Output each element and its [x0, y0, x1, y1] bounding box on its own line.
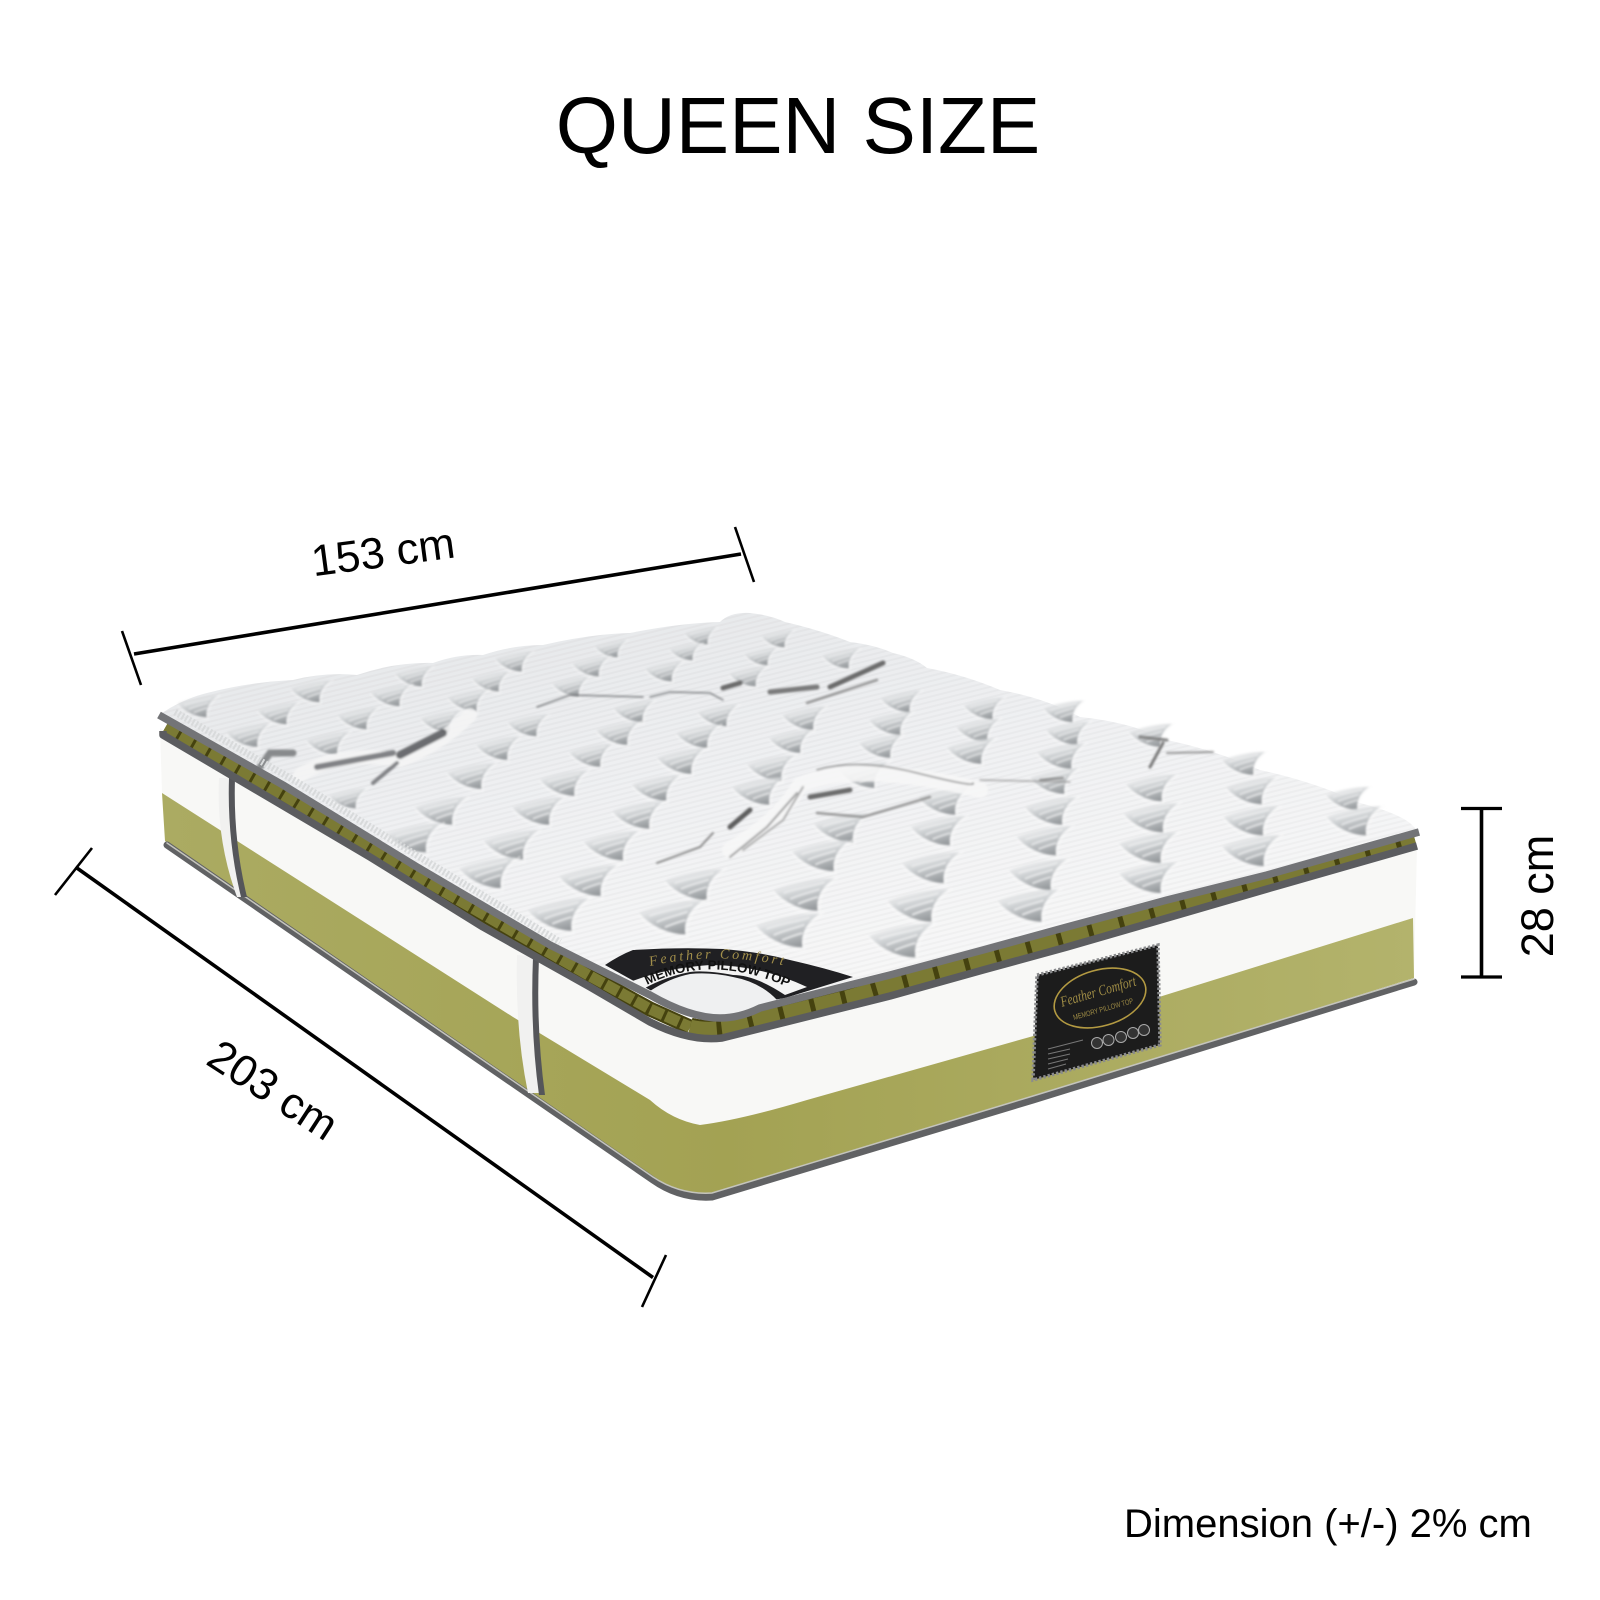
- width dimension: 153 cm: 153 cm: [308, 519, 458, 586]
- bottom piping: [167, 843, 1414, 1197]
- pillow top surface: [159, 613, 1419, 1018]
- title: QUEEN SIZE: [556, 81, 1040, 170]
- tag care icons: [1092, 1024, 1150, 1048]
- height dimension: 28 cm: [1461, 808, 1563, 978]
- corner ribbon label: Memory Pillow Top: Feather Comfort: [650, 949, 784, 966]
- upper piping: [159, 715, 1419, 1018]
- mattress: [157, 613, 1420, 1201]
- sewn product tag: [1033, 945, 1160, 1080]
- width dimension: 153 cm: [122, 519, 754, 685]
- tag logo: Feather Comfort: [1058, 974, 1139, 1011]
- corner ribbon label: Memory Pillow Top: [605, 948, 853, 1014]
- twisted olive rope trim: [165, 728, 1415, 1029]
- tag logo: MEMORY PILLOW TOP: [1072, 996, 1134, 1022]
- length dimension: 203 cm: [55, 848, 666, 1307]
- mattress side: white band: [160, 728, 1417, 1194]
- quilted tufts: [178, 627, 1385, 961]
- length dimension: 203 cm: 203 cm: [199, 1031, 347, 1150]
- tag fine print: [1048, 1040, 1083, 1069]
- corner ribbon label: Memory Pillow Top: MEMORY PILLOW TOP: [644, 960, 790, 985]
- fabric wrinkles and folds: [260, 663, 1213, 863]
- tolerance note: Dimension (+/-) 2% cm: [1124, 1502, 1532, 1546]
- stitched hem along edge: [175, 712, 560, 942]
- height dimension: 28 cm: 28 cm: [1512, 835, 1563, 957]
- side straps: [219, 778, 545, 1095]
- tag logo: [1047, 958, 1153, 1038]
- lower piping: [163, 731, 1417, 1039]
- mattress side: green base band: [162, 793, 1414, 1194]
